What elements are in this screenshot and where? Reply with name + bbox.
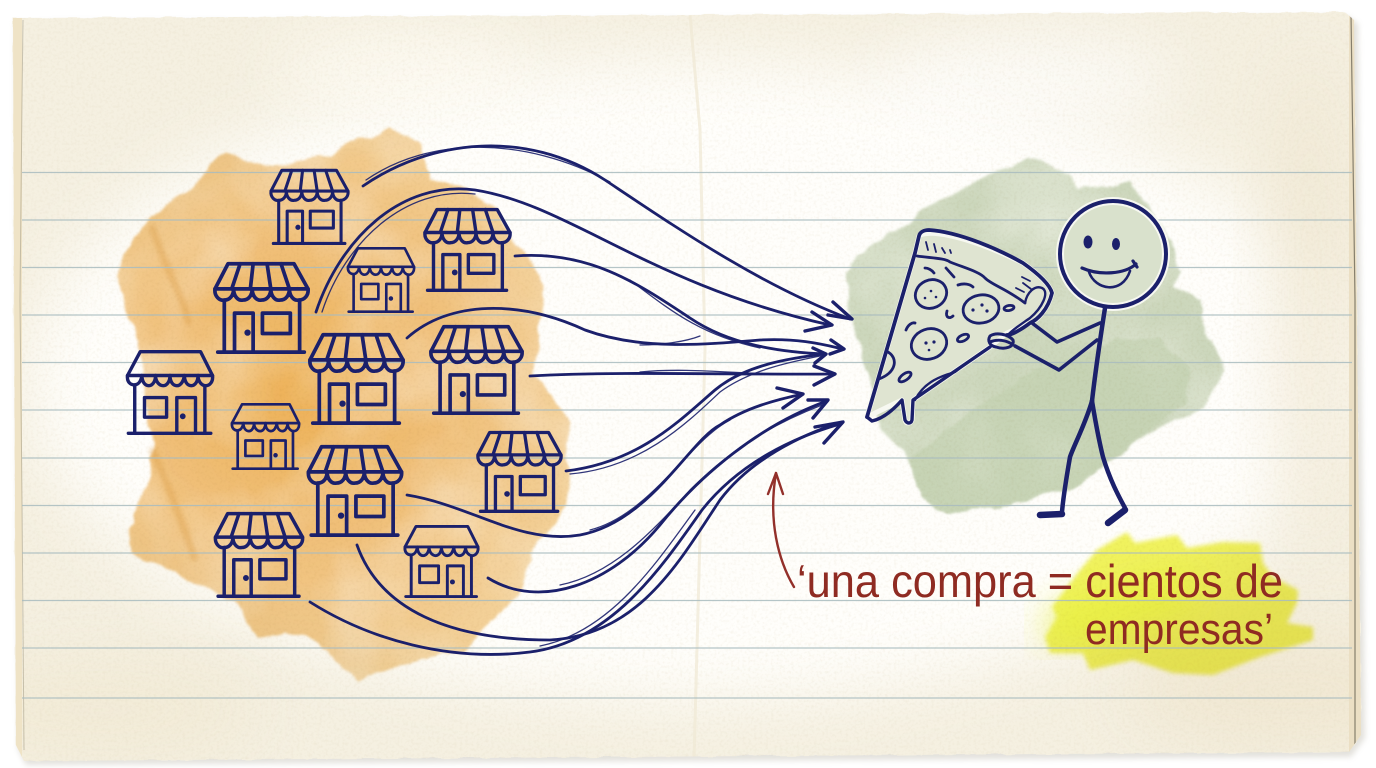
arrow 7 [407, 388, 803, 537]
arrow 5 [530, 366, 835, 385]
arrow 3 [515, 255, 826, 363]
stick figure [989, 201, 1166, 523]
caption: una compra = cientos de empresas: ‘una compra = cientos de [797, 555, 1283, 607]
arrow 6 [566, 354, 825, 474]
store 5 [348, 248, 414, 312]
body and legs [1040, 308, 1125, 523]
store 12 [405, 526, 478, 597]
arrows from stores to the pizza [310, 146, 852, 654]
caption: una compra = cientos de empresas: empresas’ [1085, 605, 1273, 654]
pepperoni spots [924, 290, 989, 351]
head [1060, 201, 1166, 307]
store 7 [310, 335, 403, 423]
caption: una compra = cientos de empresas [797, 555, 1283, 654]
ruled notebook lines [22, 172, 1352, 698]
store 8 [431, 327, 522, 413]
store 10 [478, 432, 561, 511]
arrow 10 [310, 424, 840, 654]
store 9 [308, 447, 402, 535]
arrow 8 [488, 400, 828, 592]
store 4 [232, 404, 299, 469]
arrow 2 [316, 189, 832, 331]
arrow 4 [407, 308, 844, 354]
pizza slice [867, 230, 1052, 423]
arrow 9 [357, 422, 843, 640]
pepperoni [879, 268, 1014, 384]
store 11 [215, 514, 303, 596]
red arrow pointing to the arrows [768, 473, 794, 587]
store 1 [271, 170, 348, 243]
store 3 [127, 352, 213, 433]
orange watercolor wash [113, 127, 570, 683]
store 6 [425, 210, 510, 290]
green watercolor wash [847, 157, 1225, 512]
arms and hand [989, 323, 1100, 370]
arrow 1 [363, 146, 852, 319]
store 2 [215, 264, 308, 352]
storefronts: many companies [127, 170, 561, 597]
yellow highlighter [1045, 532, 1313, 675]
